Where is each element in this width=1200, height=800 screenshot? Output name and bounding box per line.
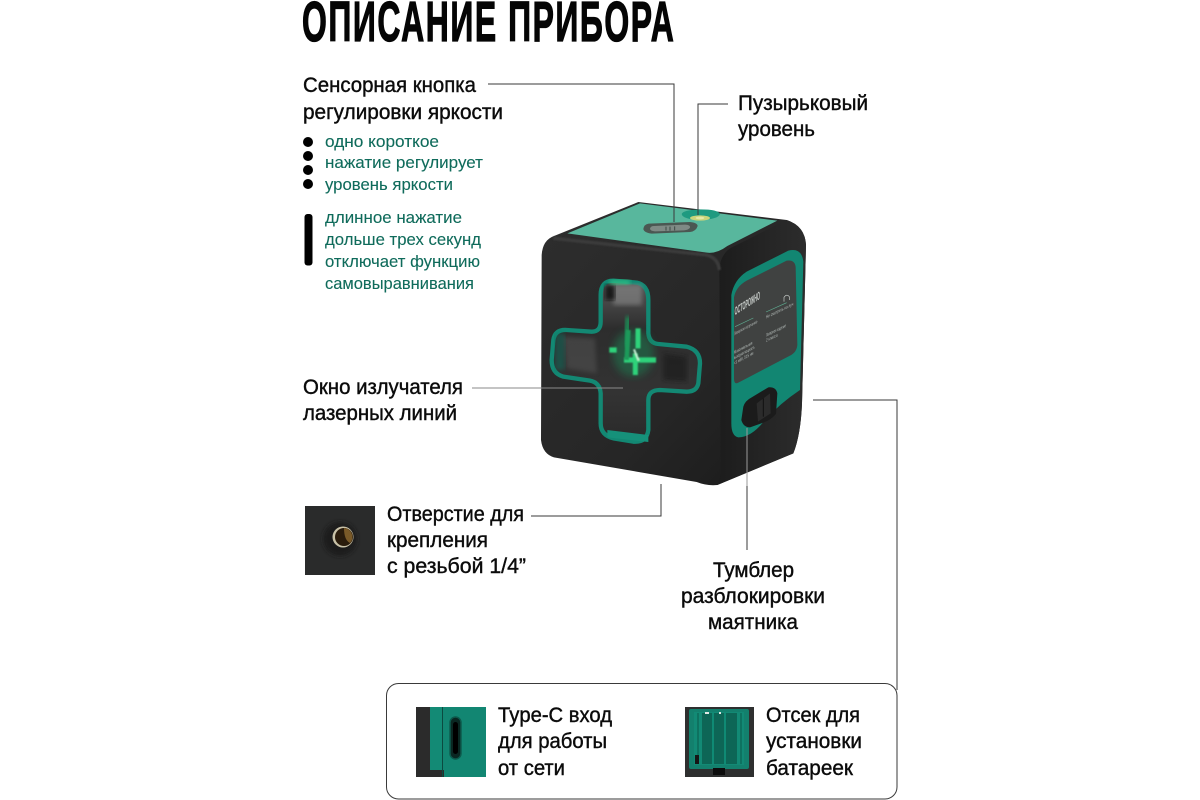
warning sticker: Не смотреть на луч <box>766 301 794 321</box>
warning sticker: Лазерное изделие <box>766 323 786 339</box>
pendulum lock switch <box>741 387 777 427</box>
callout: pendulum switch: разблокировки <box>681 585 825 608</box>
icon: battery compartment photo <box>685 707 754 777</box>
short press description: уровень яркости <box>325 176 453 194</box>
connector line to bottom panel <box>813 400 897 690</box>
warning sticker <box>734 260 797 383</box>
icon: four dots <box>303 137 313 189</box>
warning sticker: Лазерное излучение <box>734 319 757 337</box>
callout: touch button: регулировки яркости <box>303 101 503 124</box>
warning sticker: 2 класса <box>766 332 778 344</box>
bubble vial <box>682 209 720 221</box>
Type-C text: Type-C вход <box>498 704 612 727</box>
callout: pendulum switch: маятника <box>708 611 798 634</box>
callout: pendulum switch <box>681 428 825 634</box>
Type-C text <box>498 704 612 780</box>
side label frame <box>731 250 803 437</box>
callout: mounting hole: крепления <box>387 529 488 552</box>
callout: mounting hole: с резьбой 1/4” <box>387 555 526 578</box>
battery text: батареек <box>766 757 854 780</box>
Type-C text: для работы <box>498 730 607 753</box>
short press description: одно короткое <box>325 133 439 151</box>
cube body <box>541 202 806 485</box>
Type-C text: от сети <box>498 757 565 780</box>
warning sticker: выходная мощность <box>734 345 755 361</box>
long press description: самовыравнивания <box>325 275 474 293</box>
panel: rear side features <box>386 684 897 799</box>
short press description: нажатие регулирует <box>325 154 483 172</box>
icon: long bar <box>304 214 312 266</box>
laser beams <box>613 330 654 377</box>
callout: pendulum switch: Тумблер <box>713 559 794 582</box>
warning sticker: <1 мВт, 515 нм <box>734 350 754 367</box>
long press description: длинное нажатие <box>325 209 462 227</box>
callout: touch button: Сенсорная кнопка <box>303 74 476 97</box>
callout: laser window <box>303 376 623 425</box>
top front edge highlight <box>553 238 719 270</box>
battery text: установки <box>766 730 862 753</box>
long press description: дольше трех секунд <box>325 231 481 249</box>
product photo: laser level cube <box>541 202 806 485</box>
callout: bubble level: уровень <box>738 118 815 141</box>
callout: mounting hole: Отверстие для <box>387 503 524 526</box>
callout: bubble level <box>698 92 868 215</box>
top teal face <box>567 203 777 253</box>
callout: laser window: Окно излучателя <box>303 376 463 399</box>
cube side face <box>717 220 806 485</box>
long press description: отключает функцию <box>325 253 480 271</box>
warning sticker: ОСТОРОЖНО <box>735 289 760 318</box>
callout: touch button <box>303 74 674 222</box>
touch button <box>643 222 698 234</box>
short press description <box>303 133 483 194</box>
cross window <box>552 280 700 442</box>
battery text: Отсек для <box>766 704 860 727</box>
long press description <box>304 209 481 293</box>
icon: Type-C port photo <box>416 707 486 777</box>
callout: bubble level: Пузырьковый <box>738 92 868 115</box>
callout: laser window: лазерных линий <box>303 402 457 425</box>
battery text <box>766 704 862 780</box>
icon: mounting hole photo <box>305 506 375 575</box>
warning sticker: Максимальная <box>734 340 752 356</box>
callout: mounting hole <box>387 484 661 578</box>
